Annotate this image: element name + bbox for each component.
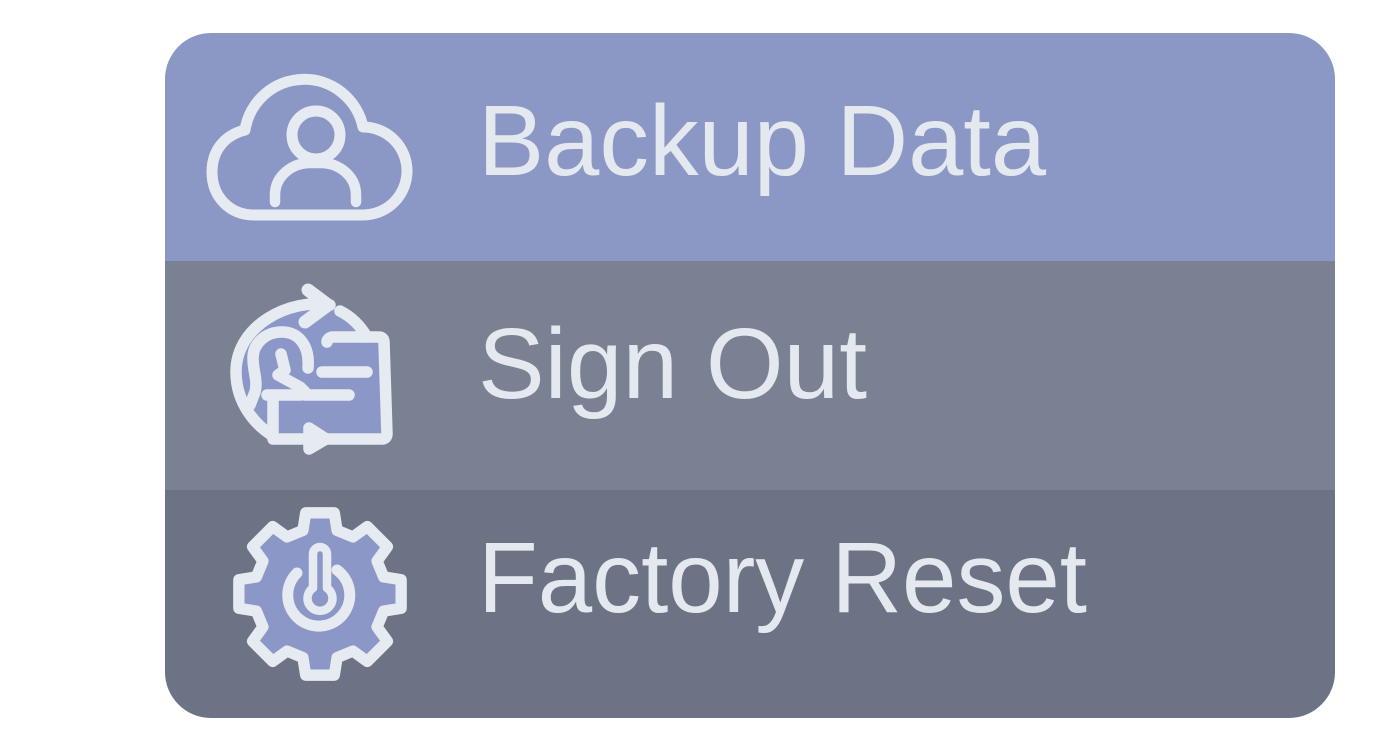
icon: gear with power and thermometer xyxy=(239,513,401,675)
row: backup data background xyxy=(165,33,1335,261)
icon: sign out cycle with document xyxy=(236,290,387,449)
label: Backup Data: Backup Data xyxy=(478,85,1046,197)
label: Sign Out: Sign Out xyxy=(478,308,867,420)
row: sign out background xyxy=(165,261,1335,490)
row: factory reset background xyxy=(165,490,1335,718)
label: Factory Reset: Factory Reset xyxy=(478,522,1087,634)
icon: cloud with user xyxy=(212,79,407,215)
panel: menu card xyxy=(165,33,1335,718)
